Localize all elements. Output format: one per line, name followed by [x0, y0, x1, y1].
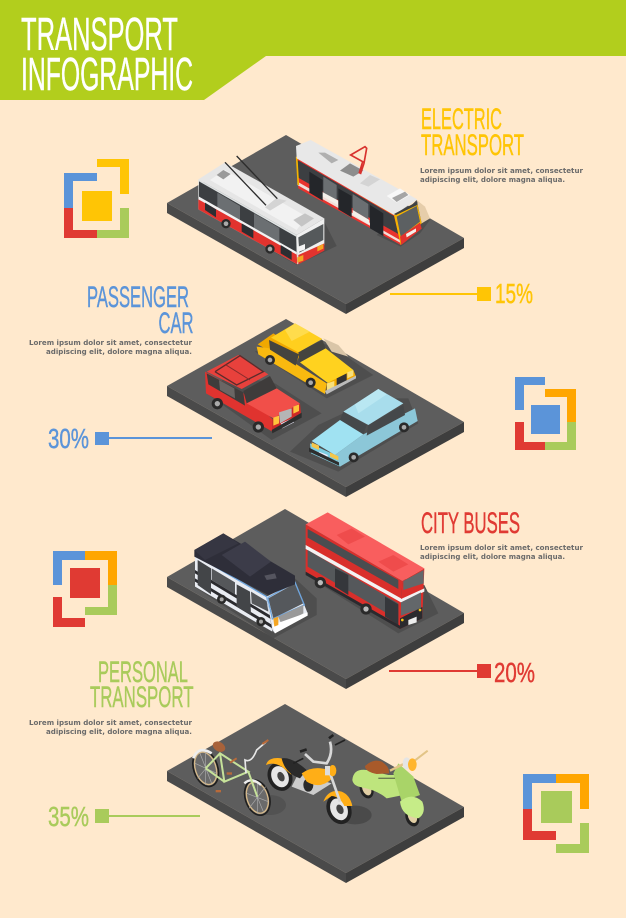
- text block: personal: Lorem ipsum dolor sit amet, consectetur: [29, 719, 193, 727]
- callout: 35%: [48, 801, 200, 832]
- callout: 35%: 35%: [48, 801, 89, 832]
- vehicle: scooter: [352, 751, 428, 828]
- title: INFOGRAPHIC: [21, 48, 193, 100]
- title: [21, 8, 193, 100]
- title: TRANSPORT: [21, 8, 178, 60]
- platform: electric: [167, 135, 464, 314]
- vehicle: yellow car: [255, 323, 373, 398]
- vehicle: trolleybus: [198, 156, 337, 265]
- vehicle: blue car: [290, 389, 418, 472]
- text block: electric: adipiscing elit, dolore magna aliqua.: [420, 176, 565, 184]
- callout: 15%: [390, 278, 533, 309]
- header banner: [0, 0, 626, 100]
- text block: electric: [420, 167, 584, 184]
- heading: personal transport: PERSONAL: [98, 656, 188, 689]
- icon: personal frame: [523, 774, 589, 853]
- platform: passenger: [167, 319, 464, 497]
- vehicle: motorcycle: [263, 735, 372, 828]
- panel: electric transport: [64, 103, 584, 314]
- text block: personal: [29, 719, 193, 736]
- vehicle: tram: [296, 140, 430, 247]
- text block: personal: adipiscing elit, dolore magna aliqua.: [46, 728, 192, 736]
- text block: passenger: adipiscing elit, dolore magna aliqua.: [46, 348, 192, 356]
- heading: electric transport: [421, 103, 524, 162]
- vehicle: red suv: [205, 355, 322, 440]
- heading: passenger car: PASSENGER: [87, 281, 189, 314]
- icon: electric frame: [64, 159, 129, 238]
- text block: city buses: adipiscing elit, dolore magna aliqua.: [420, 553, 565, 561]
- callout: 30%: 30%: [48, 423, 89, 454]
- vehicle: coach bus: [194, 533, 317, 638]
- callout: 20%: [389, 657, 535, 688]
- text block: city buses: [420, 544, 584, 561]
- text block: passenger: [29, 339, 193, 356]
- icon: passenger frame: [515, 377, 576, 450]
- heading: city buses: CITY BUSES: [421, 507, 520, 540]
- heading: passenger car: [87, 281, 194, 340]
- text block: city buses: Lorem ipsum dolor sit amet, consectetur: [420, 544, 584, 552]
- heading: passenger car: CAR: [158, 307, 194, 340]
- heading: personal transport: [90, 656, 194, 714]
- heading: electric transport: ELECTRIC: [421, 103, 502, 136]
- heading: electric transport: TRANSPORT: [421, 129, 524, 162]
- panel: personal transport: [29, 656, 589, 883]
- vehicle: bicycle: [188, 739, 286, 818]
- vehicle: double decker: [306, 512, 438, 633]
- heading: personal transport: TRANSPORT: [90, 681, 194, 714]
- platform: city buses: [167, 509, 464, 689]
- icon: city buses frame: [53, 551, 117, 627]
- panel: passenger car: [29, 281, 576, 497]
- panel: city buses: [53, 507, 584, 689]
- text block: passenger: Lorem ipsum dolor sit amet, consectetur: [29, 339, 193, 347]
- callout: 30%: [48, 423, 212, 454]
- callout: 20%: 20%: [494, 657, 535, 688]
- callout: 15%: 15%: [495, 278, 533, 309]
- platform: personal: [167, 704, 464, 883]
- text block: electric: Lorem ipsum dolor sit amet, consectetur: [420, 167, 584, 175]
